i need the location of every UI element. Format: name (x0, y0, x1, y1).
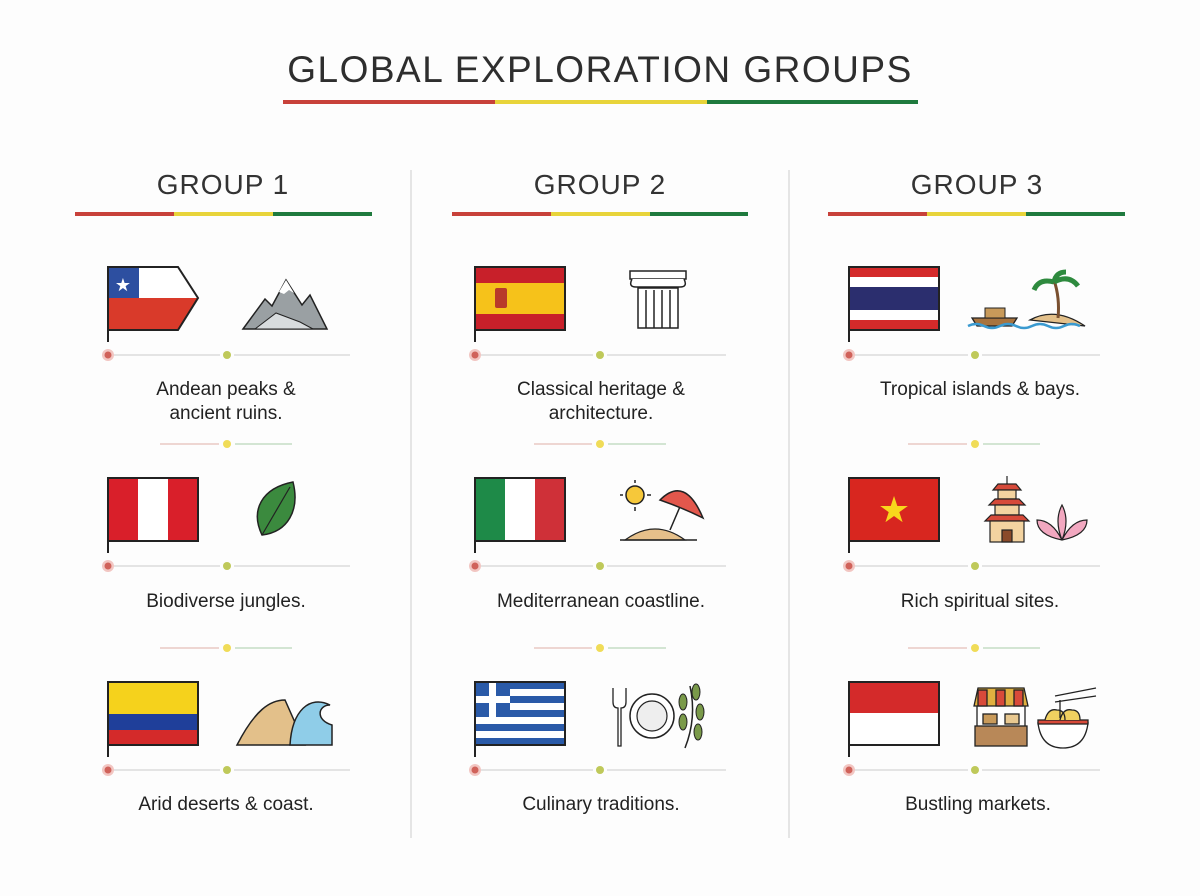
heading: group 3 (828, 169, 1125, 216)
heading: group 1 (75, 169, 372, 216)
timeline (102, 560, 350, 572)
heading: group 2 (452, 169, 748, 216)
flag: Colombia (108, 682, 198, 757)
panel: group 2 (452, 169, 748, 815)
text: Classical: architecture. (549, 403, 653, 424)
flag: Greece (475, 682, 565, 757)
timeline (843, 349, 1100, 361)
flag: Peru (108, 478, 198, 553)
flag: Chile (108, 267, 198, 342)
text: Andean: Andean peaks & (156, 379, 296, 400)
timeline (102, 349, 350, 361)
text: Culinary: Culinary traditions. (522, 794, 680, 815)
icon: pagoda and lotus (985, 476, 1087, 542)
timeline (469, 349, 726, 361)
panel: group 1 (75, 169, 372, 815)
text: Mediterranean: Mediterranean coastline. (497, 591, 705, 612)
flag: Spain (475, 267, 565, 342)
flag: Thailand (849, 267, 939, 342)
icon: boat and island (968, 272, 1085, 328)
flag: Italy (475, 478, 565, 553)
flag: Vietnam (849, 478, 939, 553)
flag: Chile: ★ (115, 275, 131, 295)
icon: beach (620, 480, 703, 540)
panel: group 3 (828, 169, 1125, 815)
text: Tropical: Tropical islands & bays. (880, 379, 1080, 400)
timeline (843, 560, 1100, 572)
text: Andean: ancient ruins. (169, 403, 283, 424)
icon: leaf (257, 482, 295, 535)
icon: desert and wave (237, 700, 332, 745)
flag: Vietnam: ★ (878, 489, 910, 530)
icon: market and noodles (974, 688, 1096, 748)
timeline (469, 764, 726, 776)
icon: column (630, 271, 686, 328)
timeline (102, 764, 350, 776)
heading: group 1: GROUP 1 (157, 169, 289, 200)
text: Arid: Arid deserts & coast. (138, 794, 314, 815)
text: Classical: Classical heritage & (517, 379, 685, 400)
icon: mountains (243, 280, 327, 329)
heading: group 3: GROUP 3 (911, 169, 1043, 200)
timeline (469, 560, 726, 572)
text: Rich spiritual: Rich spiritual sites. (901, 591, 1059, 612)
heading: group 2: GROUP 2 (534, 169, 666, 200)
text: Biodiverse: Biodiverse jungles. (146, 591, 306, 612)
icon: plate and olive (613, 684, 704, 748)
timeline (843, 764, 1100, 776)
text: Bustling: Bustling markets. (905, 794, 1051, 815)
title: GLOBAL EXPLORATION GROUPS (287, 49, 913, 90)
flag: Indonesia (849, 682, 939, 757)
